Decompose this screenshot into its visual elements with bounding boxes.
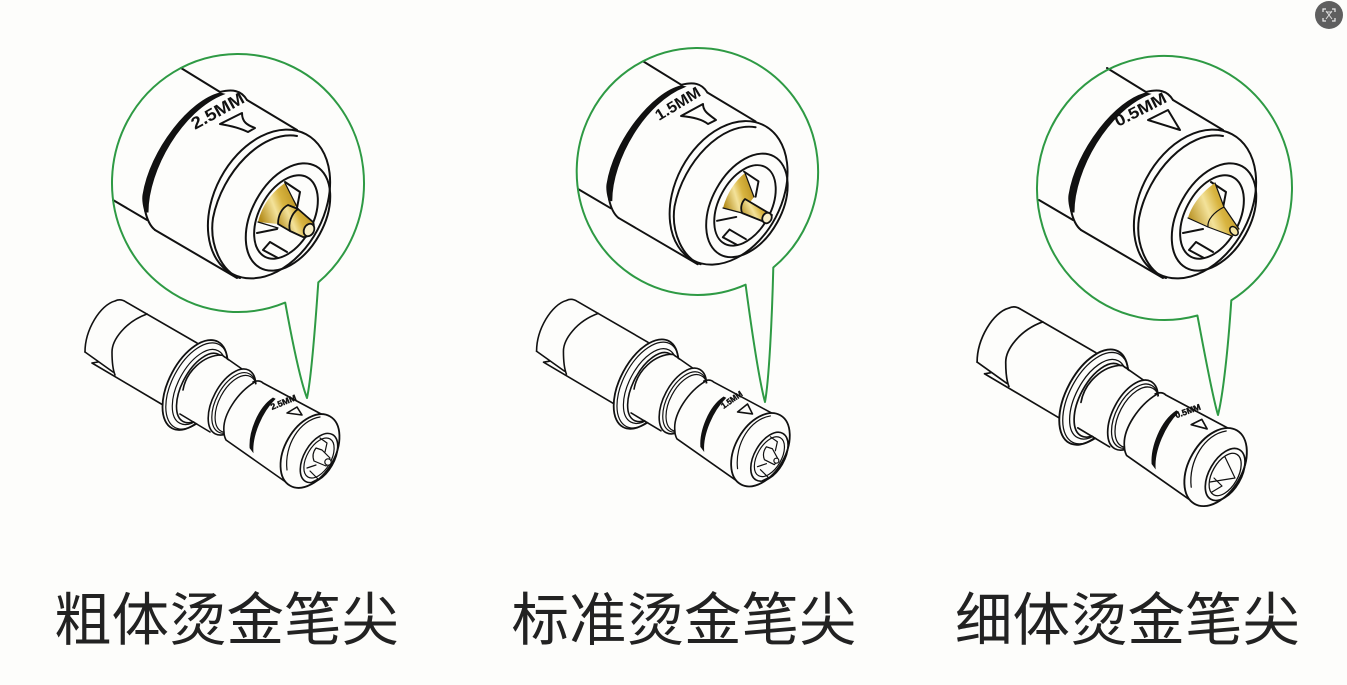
green callout bubble [1037, 56, 1292, 415]
label: 1.5MM: 1.5MM [652, 84, 704, 124]
green callout bubble [112, 54, 364, 398]
label: 2.5MM: 2.5MM [188, 89, 248, 133]
small pen: fine tip [977, 307, 1260, 517]
gold tip: medium [723, 173, 774, 225]
icon: triangle mark [1148, 110, 1180, 130]
panel: fine foil tip [955, 56, 1300, 653]
gold tip: fine [1188, 183, 1240, 237]
magnified callout: 0.5MM head [1039, 68, 1281, 300]
magnified callout: 2.5MM head [113, 68, 355, 300]
title: 粗体烫金笔尖: 粗体烫金笔尖 [54, 589, 399, 653]
title: 细体烫金笔尖: 细体烫金笔尖 [955, 589, 1300, 653]
gold tip: coarse [258, 183, 316, 238]
small pen: standard tip [537, 299, 802, 497]
green callout bubble [577, 48, 818, 402]
panel: bold foil tip [54, 54, 399, 653]
small pen: bold tip: 2.5MM [269, 392, 298, 412]
label: 0.5MM: 0.5MM [1112, 90, 1170, 131]
magnified callout: 1.5MM head [578, 62, 811, 285]
small pen: fine tip: 0.5MM [1174, 402, 1202, 420]
panel: standard foil tip [512, 48, 856, 653]
title: 标准烫金笔尖: 标准烫金笔尖 [512, 589, 856, 653]
small pen: bold tip [85, 300, 352, 498]
icon: funnel mark [220, 113, 255, 132]
icon: funnel mark [681, 104, 716, 124]
icon: image viewer badge [1315, 1, 1343, 29]
small pen: standard tip: 1.5MM [719, 389, 744, 411]
